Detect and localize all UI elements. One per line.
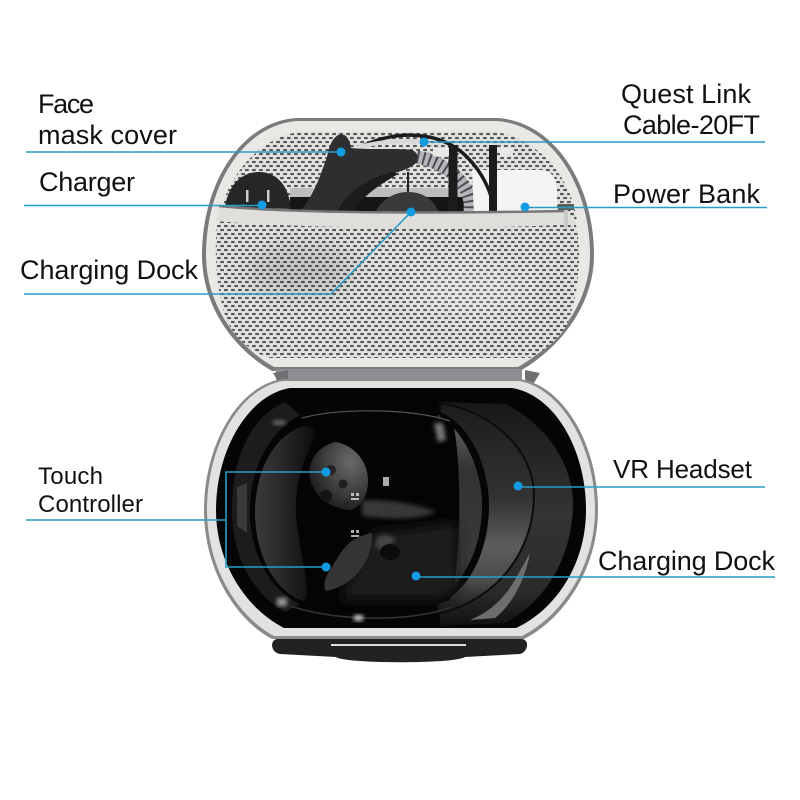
- callout: Charger: Charger: [39, 167, 135, 197]
- icon: lower touch controller: [324, 530, 400, 591]
- callout: Quest Link Cable: Quest Link: [621, 79, 752, 109]
- panel: upper case lid with mesh pocket: [202, 118, 594, 371]
- base outer shell: [204, 379, 598, 639]
- left head pad: [255, 426, 315, 601]
- hinge between lid and base: [273, 369, 540, 383]
- icon: charging dock: [375, 172, 439, 213]
- callout: Quest Link Cable: Cable-20FT: [623, 110, 760, 140]
- icon: upper touch controller: [309, 442, 389, 510]
- upper mesh compartment: [219, 132, 577, 222]
- icon: VR headset: [232, 402, 573, 626]
- lid inner lining: [206, 121, 590, 367]
- callout: Touch Controller: Controller: [38, 491, 143, 518]
- shelf behind stored items: [290, 188, 490, 198]
- callout: Face mask cover: [26, 89, 346, 156]
- icon: braided cable: [417, 157, 470, 212]
- inner visor ring: [435, 412, 489, 606]
- icon: charger plug: [225, 172, 291, 209]
- center stalk shading: [362, 500, 436, 519]
- zipper pull: [558, 204, 574, 228]
- lower body shading: [340, 524, 458, 600]
- strap band: [440, 402, 573, 626]
- side button: [237, 483, 247, 533]
- headset shell: [437, 403, 534, 614]
- icon: black coiled cables: [356, 135, 513, 212]
- glints: [434, 423, 446, 442]
- callout: Power Bank: [520, 179, 767, 212]
- visor interior: [263, 410, 459, 612]
- icon: carrying handle: [272, 639, 527, 662]
- callout: Touch Controller: Touch: [38, 463, 103, 490]
- callout: Charging Dock upper: [20, 208, 416, 294]
- outer dark case shading: [232, 402, 300, 612]
- panel: lower case base with VR headset: [204, 379, 598, 639]
- base inner lining: [207, 381, 595, 636]
- icon: face mask cover: [300, 134, 418, 212]
- callout: Charging Dock lower: [412, 546, 776, 580]
- black interior: [216, 388, 586, 628]
- callout: Face mask cover: Face: [38, 89, 94, 119]
- zippered mesh pocket: [216, 207, 579, 358]
- callout: Face mask cover: mask cover: [38, 120, 177, 150]
- callout: Quest Link Cable: [420, 79, 765, 146]
- callout: VR Headset: [514, 454, 765, 490]
- callout: Charging Dock lower: Charging Dock: [598, 546, 776, 576]
- icon: power bank: [472, 170, 557, 214]
- callout: Charging Dock upper: Charging Dock: [20, 255, 198, 285]
- callout: Power Bank: Power Bank: [613, 179, 760, 209]
- callout: Touch Controller: [26, 463, 330, 572]
- callout: VR Headset: VR Headset: [613, 454, 753, 484]
- lid outer shell: [202, 118, 594, 371]
- callout: Charger: [24, 167, 266, 210]
- light reflection on strap: [470, 553, 530, 620]
- pocket binding band: [216, 207, 577, 228]
